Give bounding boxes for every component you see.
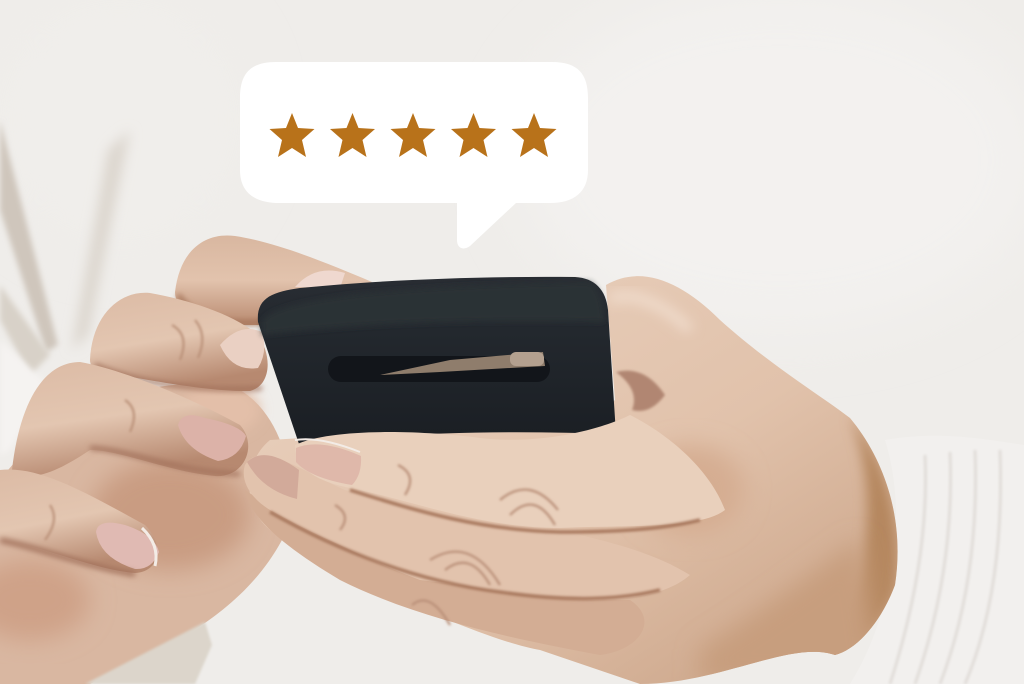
sweater cuff [700, 436, 1024, 684]
star 2 [330, 113, 375, 157]
left hand palm [0, 384, 290, 684]
speech bubble with five stars [240, 62, 588, 248]
star 1 [270, 113, 314, 157]
phone camera slot [328, 352, 550, 382]
left hand ring finger [12, 362, 248, 476]
phone [258, 277, 616, 447]
left hand little finger [0, 469, 159, 574]
right hand fingers over phone [244, 415, 725, 655]
left hand middle finger [90, 293, 268, 391]
star 3 [390, 113, 436, 157]
left hand index finger [175, 235, 372, 325]
star 4 [451, 113, 496, 157]
star 5 [512, 113, 556, 157]
right hand [249, 276, 898, 684]
